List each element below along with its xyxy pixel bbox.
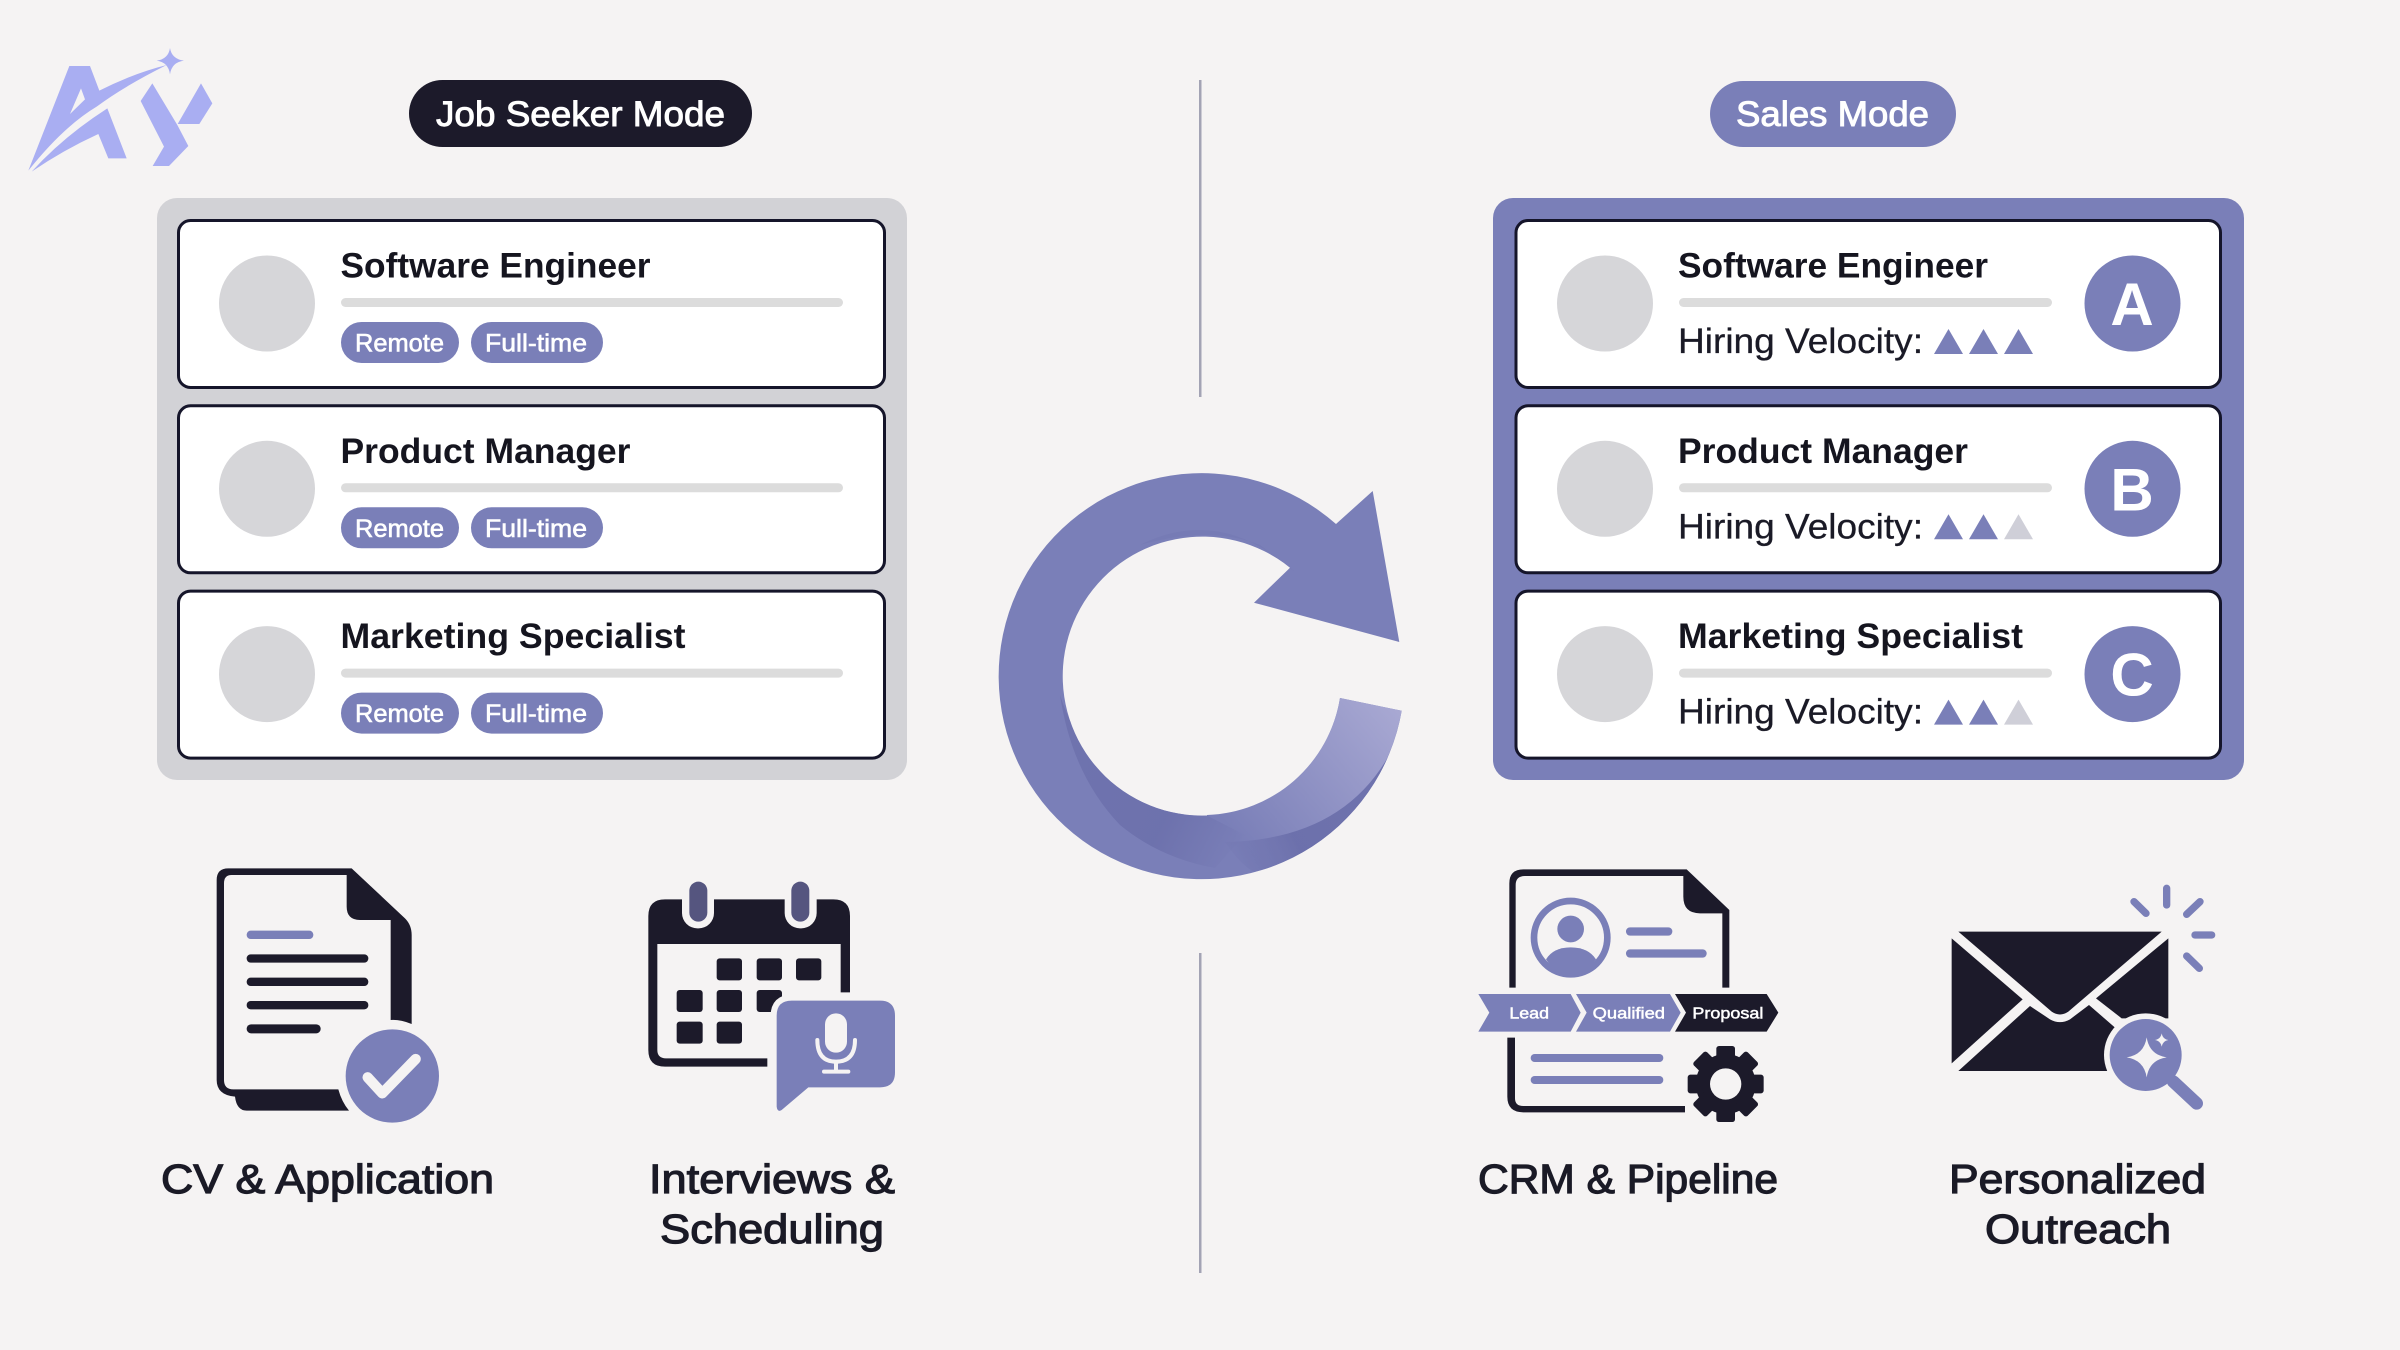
card: Product Manager grade B: Hiring Velocity: [1678,507,1923,546]
card: Software Engineer grade A: Hiring Velocity: [1678,322,1923,361]
pipeline: Lead, Qualified, Proposal: Proposal [1692,1006,1763,1023]
icon: document with check [217,868,443,1127]
card: Software Engineer: Remote [355,330,444,358]
icon: calendar with microphone bubble [648,877,895,1111]
card: Marketing Specialist: Full-time [485,700,587,728]
card: Product Manager: Remote [355,515,444,543]
badge: Sales Mode: Sales Mode [1736,95,1929,134]
gear [1688,1046,1764,1122]
card: Software Engineer: Software Engineer [340,246,651,286]
card: Product Manager grade B: Product Manager [1678,432,1968,471]
badge: Job Seeker Mode: Job Seeker Mode [436,95,725,134]
label: Personalized Outreach: Personalized [1949,1156,2206,1202]
card: Software Engineer [178,220,884,388]
label: Interviews & Scheduling: Interviews & [649,1156,895,1202]
panel: sales mode leads [1493,198,2244,780]
pipeline: Lead, Qualified, Proposal: Qualified [1593,1006,1665,1023]
card: Marketing Specialist grade C: Marketing Specialist [1678,617,2023,656]
label: CRM & Pipeline: CRM & Pipeline [1478,1156,1778,1202]
card: Marketing Specialist: Remote [355,700,444,728]
arrow: circular switch between modes [999,473,1402,880]
card: Marketing Specialist grade C [1516,591,2220,758]
card: Product Manager: Full-time [485,515,587,543]
card: Product Manager [178,406,884,573]
pipeline: Lead, Qualified, Proposal: Lead [1509,1006,1549,1023]
pipeline: Lead, Qualified, Proposal [1478,994,1778,1032]
card: Product Manager: Product Manager [340,432,631,471]
card: Product Manager grade B [1516,406,2220,573]
panel: job seeker listings [157,198,907,780]
label: Personalized Outreach: Outreach [1985,1206,2171,1252]
badge: Sales Mode [1710,81,1956,147]
card: Marketing Specialist: Marketing Specialist [340,617,686,656]
icon: CRM document with pipeline and gear [1478,869,1778,1122]
card: Software Engineer grade A: A [2110,271,2154,338]
card: Software Engineer grade A: Software Engineer [1678,246,1988,286]
icon: envelope with magnifier and sparkle [1952,888,2212,1103]
label: Personalized Outreach [1949,1156,2206,1252]
label: Interviews & Scheduling: Scheduling [660,1206,884,1252]
label: Interviews & Scheduling [649,1156,895,1252]
badge: Job Seeker Mode [409,80,752,147]
label: CV & Application: CV & Application [161,1156,494,1202]
card: Marketing Specialist grade C: C [2110,642,2154,709]
divider bottom [1199,953,1202,1273]
logo: AY with star swoosh [28,48,212,172]
card: Marketing Specialist grade C: Hiring Velocity: [1678,693,1923,732]
card: Product Manager grade B: B [2110,456,2154,523]
card: Software Engineer grade A [1516,220,2220,388]
divider top [1199,80,1202,397]
card: Software Engineer: Full-time [485,330,587,358]
card: Marketing Specialist [178,591,884,758]
